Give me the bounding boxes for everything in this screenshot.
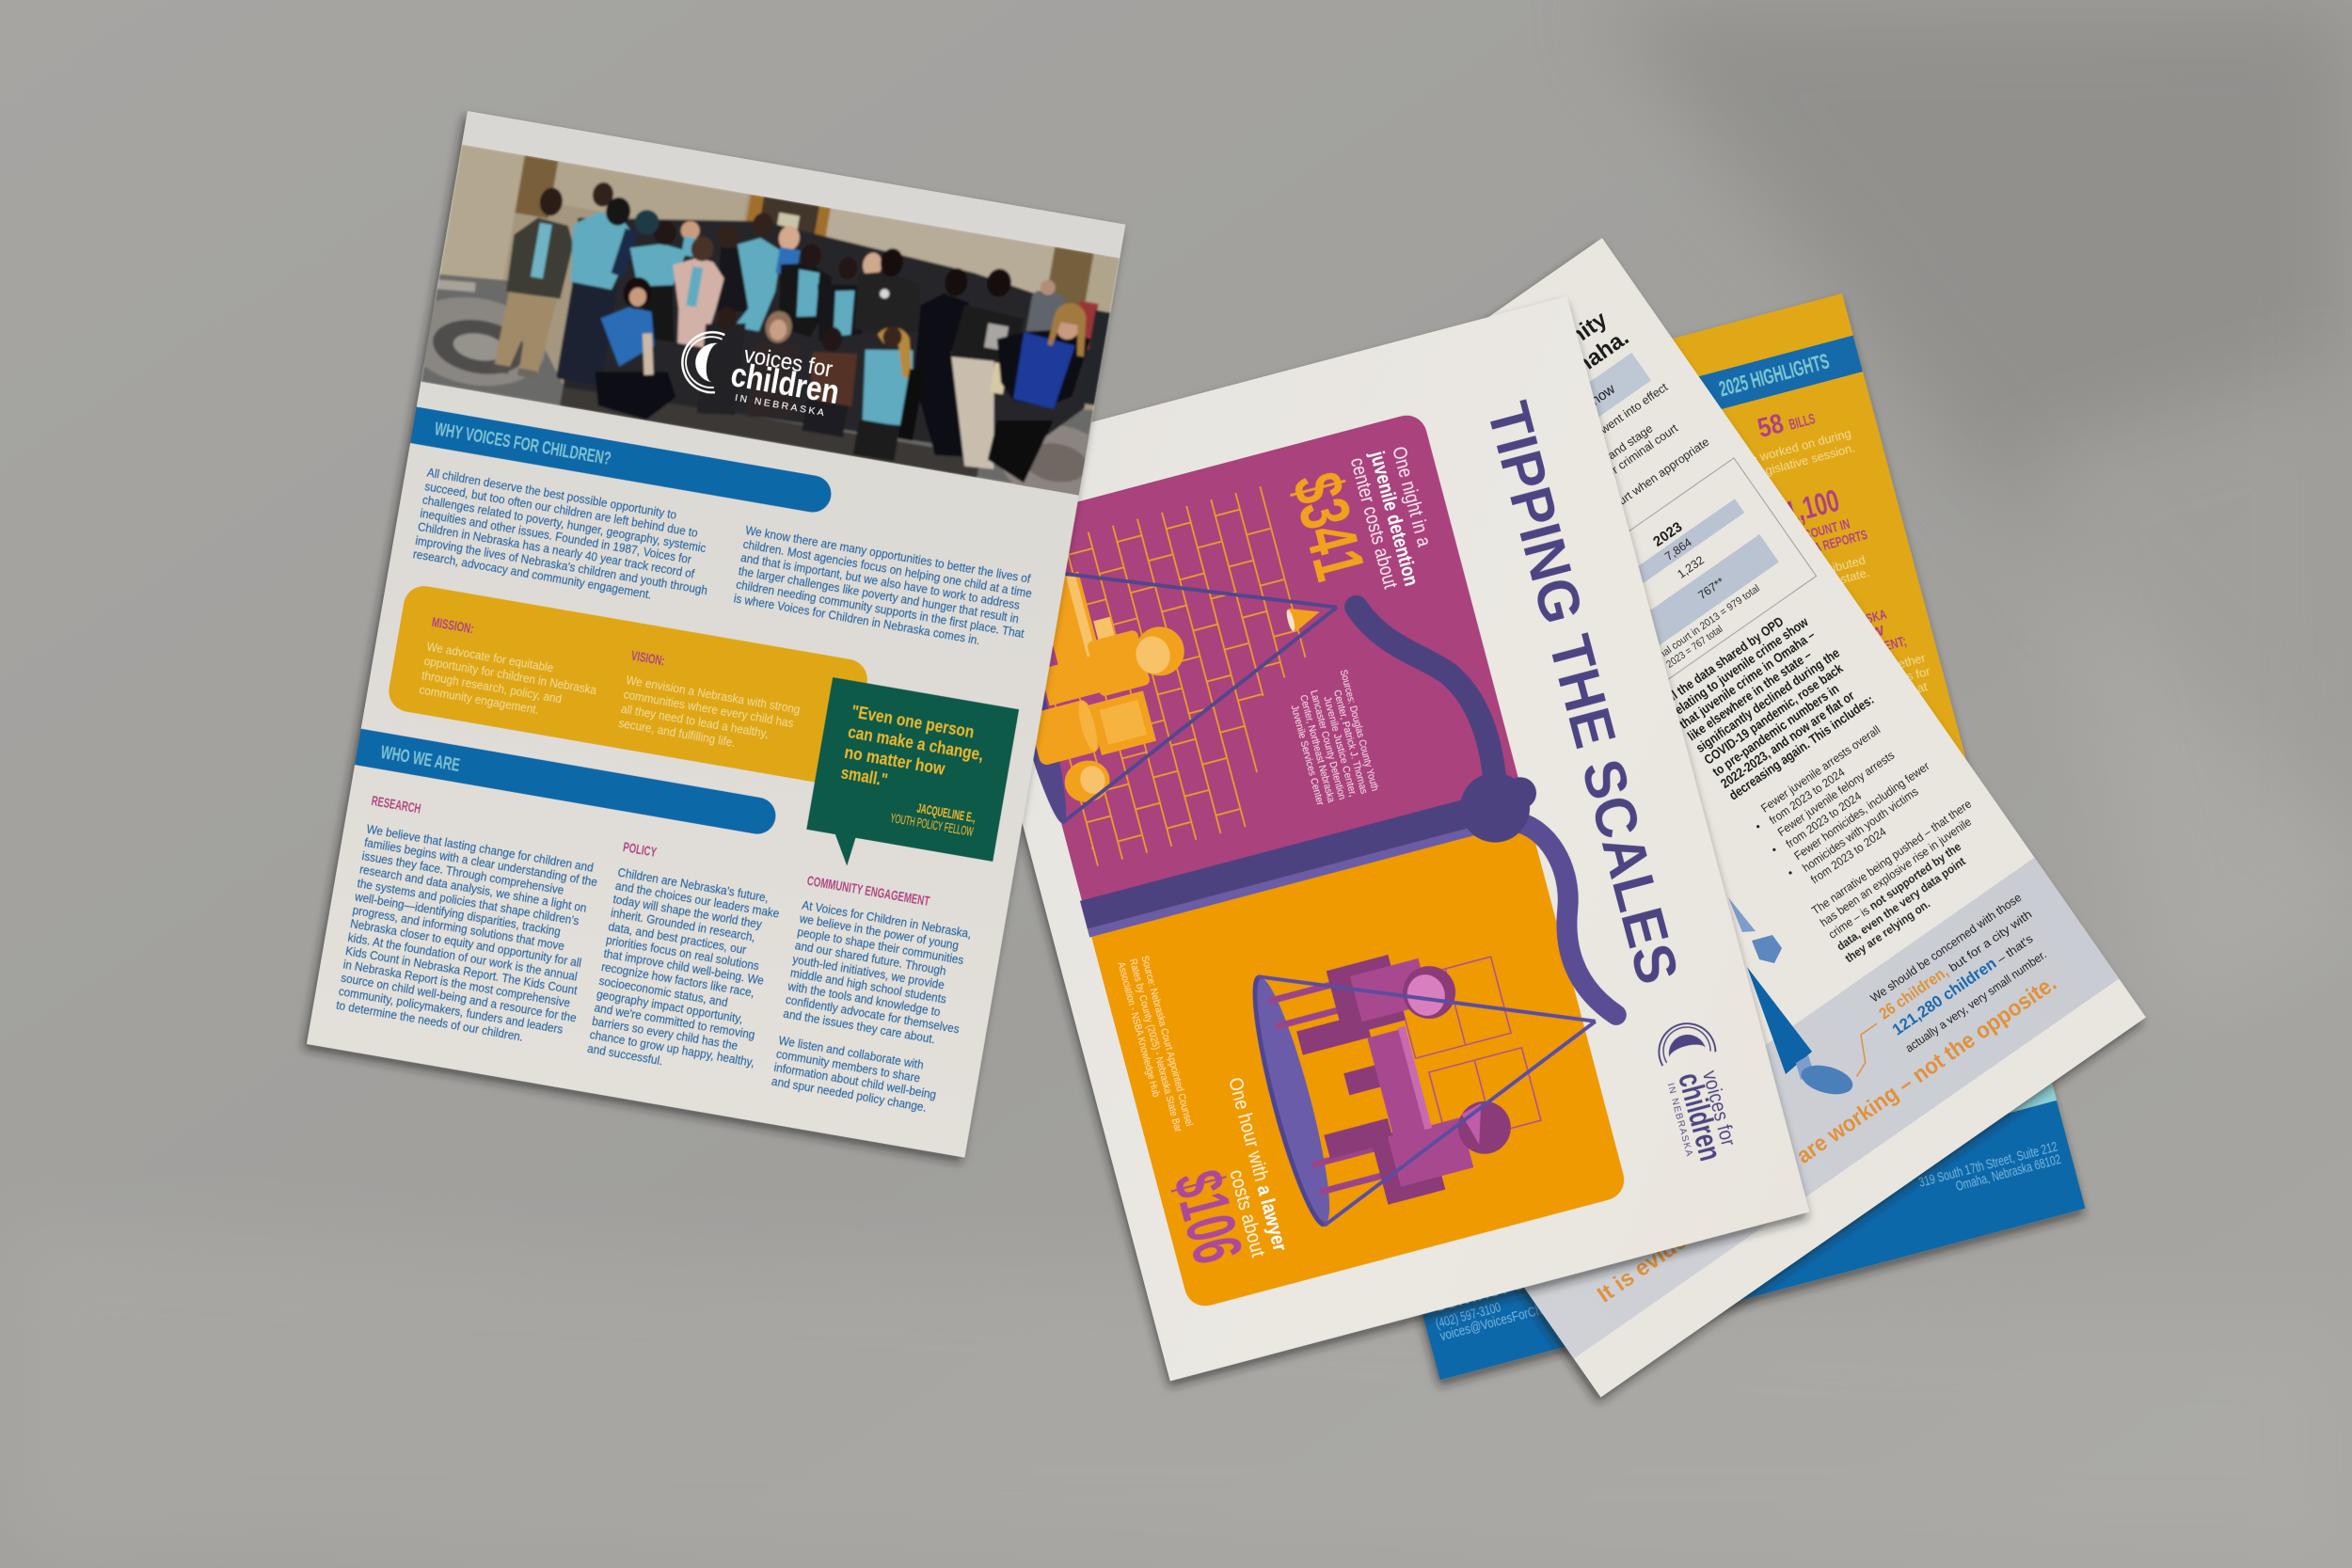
person: black hoodie (855, 271, 922, 331)
vision text: all they need to lead a healthy, (620, 702, 770, 740)
stat: 1,100: 1,100 (1781, 483, 1843, 531)
bold paragraph: that juvenile crime in Omaha – (1677, 626, 1818, 732)
text: research: to determine the needs of our children. (335, 998, 524, 1044)
text: community engagement: we believe in the power of young (798, 911, 960, 953)
quote callout: YOUTH POLICY FELLOW (889, 810, 975, 839)
closing statement left: It is evident (1593, 1216, 1709, 1307)
highlights band (1263, 335, 1863, 529)
data table (1435, 458, 1817, 784)
text: research: Nebraska closer to equity and opportunity for all (349, 917, 582, 970)
heading bar: who we are: WHO WE ARE (379, 743, 461, 776)
text: research: issues they face. Through comprehensive (361, 849, 565, 897)
text: intro column 1: Children in Nebraska has a nearly 40 year track record of (417, 520, 696, 581)
text: research: families begins with a clear understanding of the (363, 835, 598, 889)
narrative paragraph: they are relying on. (1842, 896, 1932, 965)
text: community engagement: and the issues they care about. (782, 1006, 936, 1046)
logo: voices for children: voices for (1698, 1068, 1740, 1148)
text: research: progress, and informing solutions that move (352, 903, 565, 954)
label: nebraska: NEBRASKA (1830, 606, 1888, 636)
text: intro column 1: challenges related to poverty, hunger, geography, systemic (421, 493, 707, 555)
text: research: research and data analysis, we shine a light on (358, 863, 588, 915)
panel: orange lawyer (1087, 803, 1629, 1310)
bold paragraph: All the data shared by OPD (1660, 613, 1787, 708)
heading bar: why voices for children (410, 407, 834, 515)
bullet list: Fewer homicides, including fewer (1791, 759, 1932, 863)
label: how: how (1588, 381, 1618, 409)
text: research: in Nebraska Report is the most comprehensive (342, 958, 571, 1010)
callout text: but for a city with (1947, 908, 2034, 974)
sources: detention: Sources: Douglas County Youth (1337, 669, 1380, 792)
text: policy: socioeconomic status, and (598, 974, 729, 1009)
page B: juvenile crime data page (1057, 238, 2146, 1398)
logo: voices for children: children (1671, 1069, 1728, 1164)
text: law notes: age and stage (1586, 421, 1655, 475)
bold paragraph: relating to juvenile crime show (1668, 613, 1812, 720)
text: together: that (1905, 679, 1929, 698)
text: policy: data, and best practices, our (608, 920, 747, 957)
quote callout: JACQUELINE E., (916, 800, 977, 825)
stat: 58 bills: 58 (1755, 408, 1787, 444)
heading: policy: POLICY (622, 839, 658, 861)
text: intro column 2: We know there are many opportunities to better the lives of (744, 524, 1032, 586)
logo: voices for children (white): voices for (742, 342, 834, 383)
text: community engagement: middle and high school students (789, 966, 947, 1006)
text: one hour: One hour with a lawyer (1224, 1075, 1291, 1254)
text: bills description: We worked on during (1738, 426, 1852, 469)
bold paragraph: COVID-19 pandemic, rose back (1701, 660, 1846, 768)
quote callout (802, 677, 1019, 891)
quote callout: "Even one person (850, 701, 976, 741)
data table: 767** (1695, 575, 1727, 602)
sources: lawyer: Association - NSBA Knowledge Hub (1115, 960, 1162, 1099)
text: research: kids. At the foundation of our work is the annual (347, 930, 579, 984)
headline: community (1499, 307, 1613, 396)
person: teal shirt 2 (644, 286, 674, 342)
text: community engagement: and our shared future. Through (794, 939, 947, 978)
panel: magenta juvenile detention (983, 411, 1525, 920)
person: pink jacket (672, 257, 726, 349)
text: bills description: the legislative session. (1735, 440, 1856, 485)
label: nebraska: ENGAGEMENT; (1832, 633, 1908, 668)
text: research: We believe that lasting change for children and (366, 822, 595, 875)
logo: voices for children (white) (676, 327, 846, 420)
page C: yellow and blue back page (1197, 293, 2086, 1380)
text: reports description: distributed (1809, 552, 1867, 580)
data table: 2023 (1650, 519, 1685, 550)
vision text: We envision a Nebraska with strong (625, 673, 802, 717)
text: research: community, policymakers, funders and leaders (338, 985, 564, 1037)
text: one hour: costs about (1225, 1167, 1269, 1259)
text: community engagement: people to shape their communities (796, 926, 964, 967)
quote callout: no matter how (843, 742, 947, 779)
person: woman in blue (985, 410, 1054, 486)
illustration: walking figure (1728, 897, 1856, 1100)
sources: detention: Center, Northeast Nebraska (1297, 693, 1337, 804)
text: intro column 1: research, advocacy and community engagement. (412, 547, 653, 602)
narrative paragraph: has been an explosive rise in juvenile (1818, 815, 1974, 929)
mission text: community engagement. (419, 683, 540, 717)
sources: lawyer: Rates by County (2025) - Nebraska State Bar (1127, 958, 1184, 1133)
callout text: We should be concerned with those (1868, 891, 2024, 1005)
text: reports description: across the state. (1781, 565, 1871, 602)
text: intro column 2: and that is important, but we also have to work to address (739, 550, 1021, 612)
text: law notes: court when appropriate (1605, 436, 1711, 515)
narrative paragraph: crime – is not supported by the (1826, 840, 1963, 942)
callout text: 26 children, (1876, 962, 1951, 1023)
bullet list: from 2023 to 2024 (1784, 789, 1864, 851)
heading bar: why voices for children: WHY VOICES FOR CHILDREN? (433, 420, 612, 469)
person: front row centre (691, 317, 751, 420)
text: intro column 2: children. Most agencies focus on helping one child at a time (742, 537, 1033, 600)
person: teal shirt 1 (556, 280, 617, 386)
text: policy: priorities focus on real solutions (605, 933, 760, 973)
text: policy: geography impact opportunity, (596, 988, 744, 1026)
page: Why Voices for Children (283, 107, 1153, 1163)
person: cream pants (932, 348, 1012, 471)
stat: $106: $106 (1158, 1163, 1257, 1271)
photo: youth advocates group (421, 145, 1120, 496)
logo: voices for children (1651, 1018, 1743, 1166)
label: nebraska: NOW (1849, 623, 1886, 647)
sources: lawyer: Source: Nebraska Court Appointed Counsel (1138, 955, 1195, 1128)
text: intro column 1: improving the lives of Nebraska's children and youth through (414, 533, 708, 597)
person: jacket and khakis (494, 290, 557, 374)
vision text: secure, and fulfilling life. (617, 716, 737, 750)
heading: research: RESEARCH (370, 793, 422, 817)
mission text: through research, policy, and (421, 669, 563, 705)
label: kids count reports: COUNT IN (1803, 515, 1851, 544)
text: research: well-being—identifying disparities, tracking (353, 890, 562, 939)
bullet list: from 2023 to 2024 (1808, 825, 1889, 887)
data table: criminal court in 2013 = 979 total (1640, 583, 1762, 673)
headline: in Omaha. (1530, 325, 1633, 408)
address: 319 South 17th Street, Suite 212 (1917, 1140, 2059, 1191)
text: law notes: or criminal court (1604, 421, 1680, 480)
text: research: Kids Count in Nebraska Report. The Kids Count (344, 944, 579, 997)
bullet list: homicides with youth victims (1800, 784, 1921, 875)
crowd backdrop (563, 216, 1090, 444)
person: tall man teal (736, 236, 781, 333)
person: kneeling blue shirt (589, 359, 680, 424)
text: one night: center costs about (1345, 455, 1401, 591)
person: tall black (914, 293, 969, 457)
contact heading: CONTACT US (1432, 1272, 1536, 1316)
person: black cardigan with teal (779, 262, 832, 337)
logo: voices for children (white): children (728, 355, 842, 411)
person: teal shirt with blonde hair (853, 342, 924, 430)
text: policy: and we're committed to removing (594, 1001, 756, 1042)
data table: 1,232 (1675, 553, 1707, 581)
label: kids count reports: A REPORTS (1812, 527, 1869, 556)
text: intro column 2: is where Voices for Children in Nebraska comes in. (733, 592, 981, 647)
bold paragraph: decreasing again. This includes: (1726, 691, 1877, 803)
stat: 58 bills (1755, 400, 1818, 444)
text: research: source on child well-being and a resource for the (340, 971, 578, 1025)
pivot (1453, 763, 1547, 850)
bold paragraph: to pre-pandemic numbers in (1709, 681, 1842, 780)
text: community engagement: At Voices for Children in Nebraska, (801, 898, 973, 941)
bold paragraph: like elsewhere in the state – (1685, 647, 1814, 744)
text: intro column 1: succeed, but too often our children are left behind due to (423, 480, 699, 540)
text: policy: that improve child well-being. We (603, 946, 765, 988)
text: intro column 1: inequities and other issues. Founded in 1987, Voices for (419, 506, 692, 566)
callout text: – that's (1994, 932, 2036, 966)
sources: detention: Juvenile Justice Center, (1321, 695, 1359, 798)
text: one night (1345, 443, 1444, 594)
highlights heading: 2025 HIGHLIGHTS (1716, 348, 1832, 401)
text: together: together (1880, 650, 1928, 675)
text: together: voices for (1877, 663, 1932, 690)
callout text: 121,280 children (1889, 955, 2000, 1038)
bullet list: Fewer juvenile arrests overall (1758, 722, 1883, 816)
beam of the scale (1080, 791, 1504, 938)
narrative paragraph: The narrative being pushed – that there (1809, 797, 1974, 917)
grey highlight row (1429, 353, 1651, 521)
text: research: the systems and policies that shape children's (357, 877, 580, 928)
closing statement right: are working – not the opposite. (1792, 971, 2061, 1169)
sources: detention: Center, Patrick J. Thomas (1331, 689, 1370, 796)
address: Omaha, Nebraska 68102 (1954, 1152, 2062, 1195)
text: policy: Children are Nebraska's future, (616, 865, 770, 905)
panel: mission and vision (386, 583, 870, 788)
page A: Tipping the Scales (928, 296, 1809, 1381)
title: TIPPING THE SCALES (1474, 396, 1690, 990)
sources: detention: Lancaster County Detention (1308, 689, 1347, 801)
heading bar: who we are (355, 729, 779, 837)
text: intro column 2: children needing community supports in the first place. That (735, 578, 1025, 641)
text: intro column 1: All children deserve the best possible opportunity to (426, 466, 677, 522)
text: community engagement: with the tools and knowledge to (786, 979, 942, 1020)
callout leader line (1838, 1023, 1896, 1077)
person: brown jacket (803, 346, 861, 412)
scale pan: lawyer side (1239, 895, 1629, 1231)
text: community engagement: community members to share (775, 1047, 921, 1085)
contact details: (402) 597-3100 (1434, 1300, 1502, 1332)
text: policy: and successful. (586, 1041, 664, 1068)
text: community engagement: confidently advocate for themselves (785, 993, 961, 1037)
text: policy: barriers so every child has the (591, 1014, 739, 1053)
data table: 7,864 (1662, 535, 1694, 563)
mission text: We advocate for equitable (425, 640, 555, 674)
sources: detention: Juvenile Services Center (1288, 704, 1326, 807)
text: policy: today will shape the world they (612, 893, 764, 932)
text: policy: chance to grow up happy, healthy, (589, 1028, 755, 1069)
grey callout band (1489, 858, 2119, 1358)
logo: voices for children (white): IN NEBRASKA (734, 392, 825, 419)
contact details: voices@VoicesForChildren.com (1438, 1291, 1593, 1344)
text: policy: inherit. Grounded in research, (610, 906, 756, 944)
bullet dots (1756, 825, 1792, 875)
wall and floor (502, 194, 1094, 412)
mission heading: MISSION: (431, 614, 475, 637)
text: community engagement: and spur needed policy change. (771, 1074, 928, 1115)
text: policy: and the choices our leaders make (614, 879, 781, 921)
text: one night: juvenile detention (1365, 449, 1422, 588)
stat: 58 bills: BILLS (1788, 411, 1818, 434)
logo: voices for children: IN NEBRASKA (1665, 1082, 1694, 1158)
vision heading: VISION: (630, 647, 666, 669)
text: law notes: law went into effect (1581, 380, 1671, 449)
text: community engagement: youth-led initiatives, we provide (791, 953, 946, 992)
data table: 2023 = 767 total (1664, 624, 1725, 671)
narrative paragraph: data, even the very data point (1835, 854, 1968, 954)
text: community engagement: We listen and collaborate with (777, 1034, 925, 1072)
text: community engagement: information about child well-being (773, 1061, 937, 1102)
person: black hoodie centre (717, 246, 747, 312)
heading: community engagement: COMMUNITY ENGAGEMENT (806, 873, 930, 910)
text: policy: recognize how factors like race, (600, 960, 755, 1000)
scale pan: detention side (977, 469, 1373, 828)
bold paragraph: significantly declined during the (1692, 645, 1842, 755)
stat: $341: $341 (1278, 465, 1380, 588)
bullet list: Fewer juvenile felony arrests (1775, 749, 1897, 839)
brick wall (1054, 486, 1306, 866)
vision text: communities where every child has (623, 688, 795, 730)
quote callout: can make a change, (847, 721, 985, 764)
lower arm of the scale (1513, 809, 1616, 1028)
upper arm of the scale (1357, 583, 1501, 815)
text: intro column 2: the larger challenges like poverty and hunger that result in (738, 564, 1020, 626)
bold paragraph: 2022-2023, and now are flat or (1718, 688, 1857, 791)
callout text: actually a very, very small number. (1903, 948, 2049, 1055)
mission text: opportunity for children in Nebraska (423, 654, 597, 697)
quote callout: small." (839, 762, 889, 789)
bullet list: from 2023 to 2024 (1767, 765, 1848, 827)
text: one night: One night in a (1388, 444, 1435, 549)
